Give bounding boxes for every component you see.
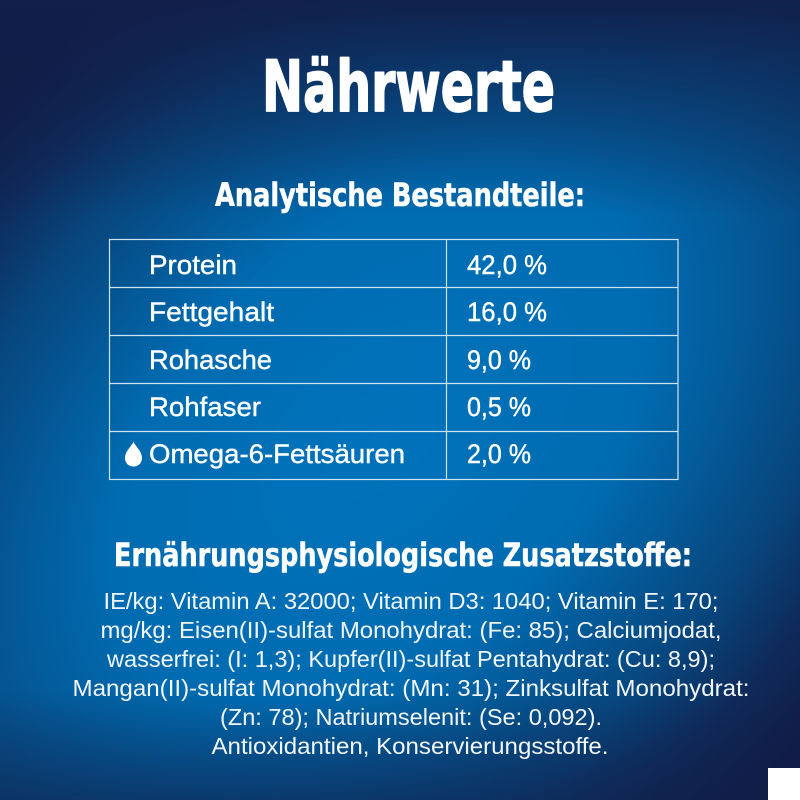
row: protein: 42,0 % [467,250,547,280]
row: omega-6: Omega-6-Fettsäuren [149,439,405,469]
row: crude fibre [149,392,531,422]
title: Nährwerte [262,46,555,128]
row: fat [149,297,547,327]
row: protein: Protein [149,250,237,280]
white corner block [768,768,800,800]
nutrition table [110,240,678,480]
row: fat: Fettgehalt [149,297,275,327]
row: crude fibre: Rohfaser [149,392,261,422]
table grid [110,240,678,480]
row: crude fibre: 0,5 % [467,392,531,422]
row: omega-6 [125,439,531,469]
heading: analytical constituents: Analytische Bestandteile: [215,176,585,214]
icon: oil drop [125,442,142,466]
row: fat: 16,0 % [467,297,547,327]
row: protein [149,250,547,280]
additives text block: Mangan(II)-sulfat Monohydrat: (Mn: 31); Zinksulfat Monohydrat: [72,675,750,701]
row: crude ash: Rohasche [149,345,272,375]
additives text block [72,588,750,759]
additives text block: IE/kg: Vitamin A: 32000; Vitamin D3: 1040; Vitamin E: 170; [104,588,718,614]
additives text block: (Zn: 78); Natriumselenit: (Se: 0,092). [220,704,602,730]
row: omega-6: 2,0 % [467,439,531,469]
additives text block: Antioxidantien, Konservierungsstoffe. [212,733,608,759]
additives text block: wasserfrei: (I: 1,3); Kupfer(II)-sulfat Pentahydrat: (Cu: 8,9); [106,646,715,672]
additives text block: mg/kg: Eisen(II)-sulfat Monohydrat: (Fe: 85); Calciumjodat, [100,617,722,643]
row: crude ash: 9,0 % [467,345,531,375]
row: crude ash [149,345,531,375]
